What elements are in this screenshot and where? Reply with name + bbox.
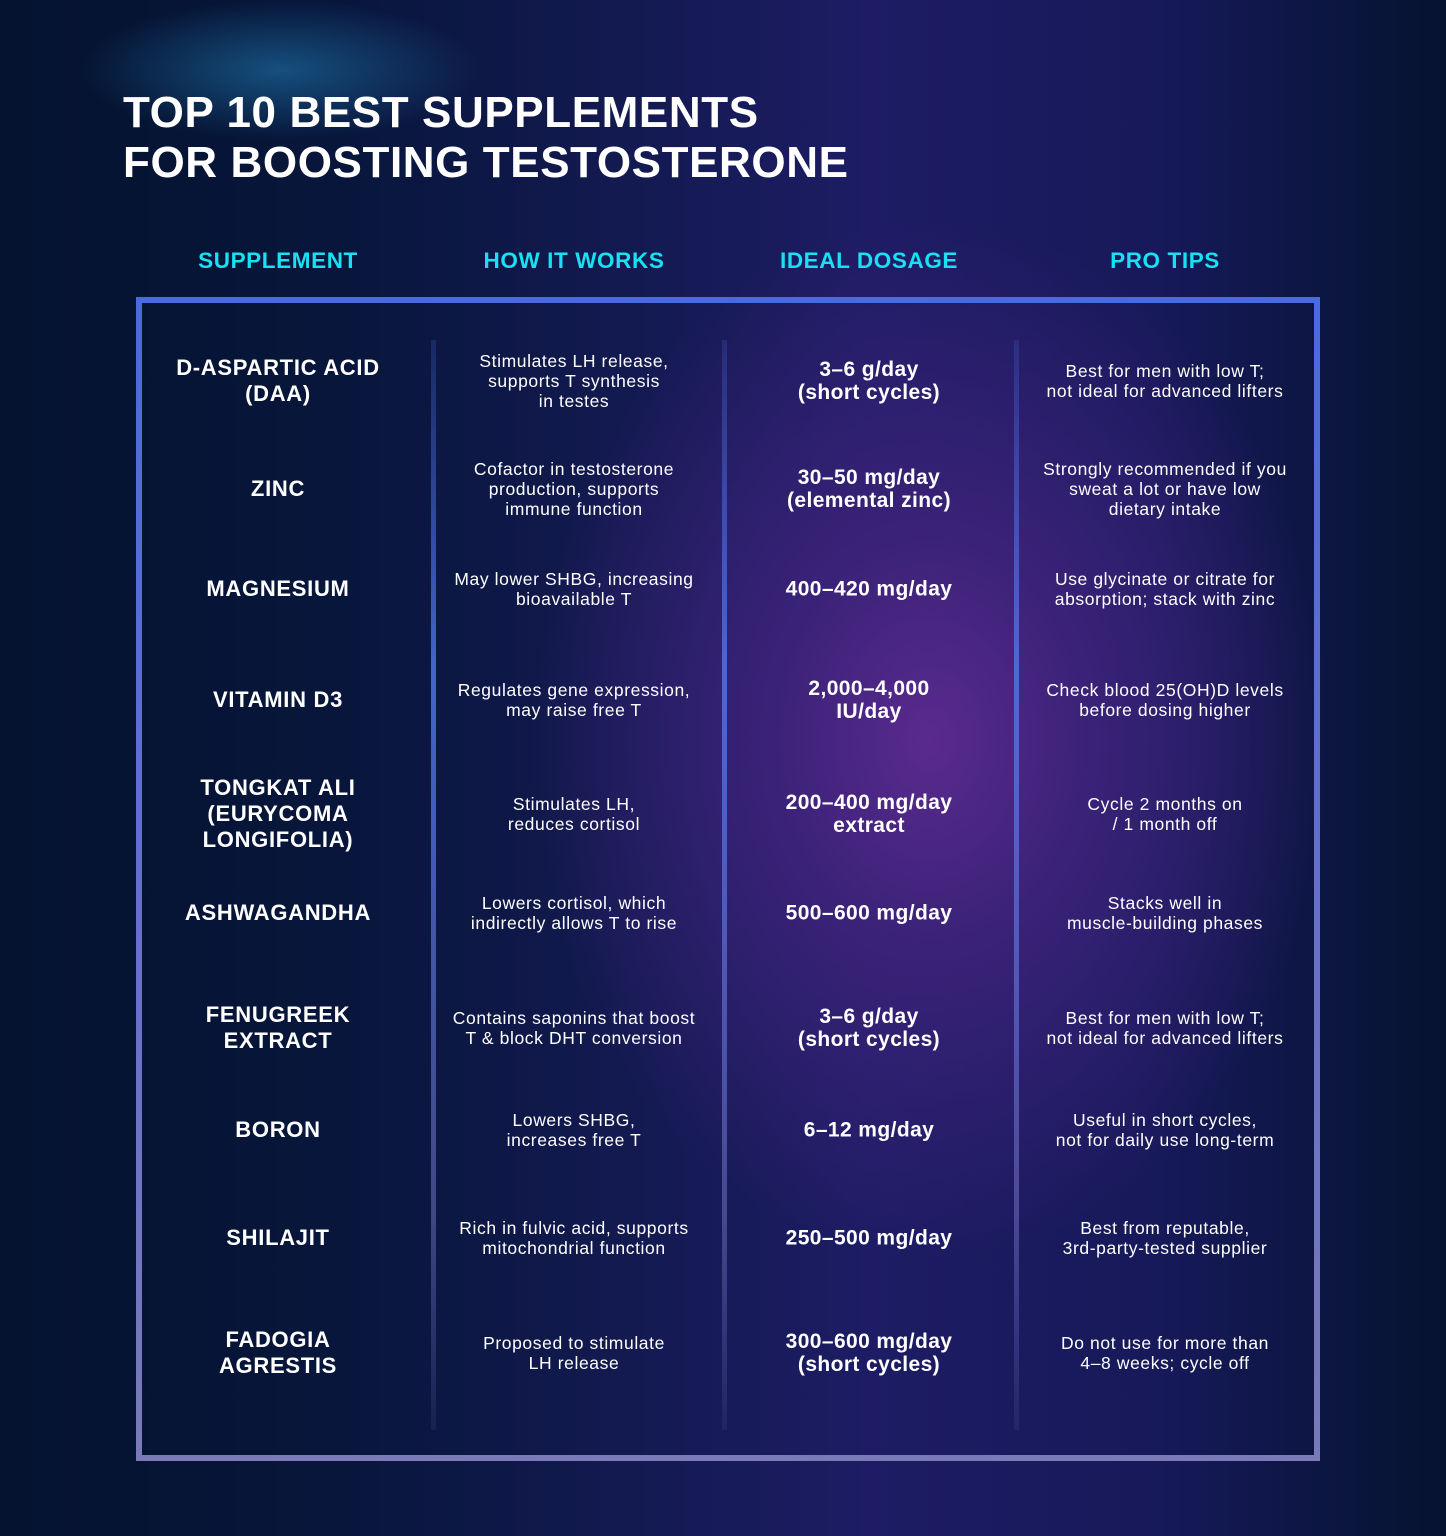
- table rows: 3–6 g/day: [819, 1005, 919, 1028]
- column headers: PRO TIPS: [1110, 248, 1220, 273]
- table rows: 500–600 mg/day: [786, 902, 952, 924]
- table rows: Do not use for more than: [1061, 1333, 1269, 1353]
- table rows: 6–12 mg/day: [804, 1118, 934, 1142]
- table rows: 3–6 g/day: [819, 358, 919, 381]
- table rows: ZINC: [251, 476, 305, 501]
- table frame: [136, 297, 1320, 1461]
- table rows: (short cycles): [798, 1353, 940, 1376]
- title: [123, 88, 849, 187]
- table rows: (elemental zinc): [787, 489, 951, 512]
- table rows: production, supports: [489, 479, 659, 499]
- table rows: 400–420 mg/day: [786, 578, 952, 600]
- table rows: 250–500 mg/day: [786, 1226, 952, 1250]
- title: FOR BOOSTING TESTOSTERONE: [123, 138, 849, 187]
- table rows: / 1 month off: [1113, 814, 1217, 834]
- table rows: Stacks well in: [1108, 893, 1222, 913]
- table rows: VITAMIN D3: [213, 687, 343, 712]
- table rows: mitochondrial function: [482, 1238, 666, 1258]
- table rows: ASHWAGANDHA: [185, 900, 371, 925]
- table rows: SHILAJIT: [226, 1225, 330, 1250]
- table rows: Use glycinate or citrate for: [1055, 569, 1275, 589]
- table rows: May lower SHBG, increasing: [454, 569, 694, 589]
- table rows: Rich in fulvic acid, supports: [459, 1218, 689, 1238]
- table rows: immune function: [505, 499, 643, 519]
- table rows: Cycle 2 months on: [1087, 794, 1243, 814]
- table rows: T & block DHT conversion: [465, 1028, 683, 1048]
- table rows: LONGIFOLIA): [203, 827, 353, 852]
- row: shilajit: [226, 1218, 1267, 1258]
- table rows: Stimulates LH release,: [479, 351, 669, 371]
- column headers: HOW IT WORKS: [484, 248, 664, 273]
- row: ashwagandha: [185, 893, 1263, 933]
- table rows: Regulates gene expression,: [458, 680, 690, 700]
- table rows: LH release: [529, 1353, 619, 1373]
- table rows: Check blood 25(OH)D levels: [1046, 680, 1284, 700]
- table rows: (DAA): [245, 381, 311, 406]
- table rows: Best for men with low T;: [1066, 1008, 1264, 1028]
- table rows: indirectly allows T to rise: [471, 913, 677, 933]
- table rows: IU/day: [836, 700, 902, 723]
- row: vitamin D3: [213, 677, 1284, 723]
- row: magnesium: [206, 569, 1275, 609]
- table rows: Proposed to stimulate: [483, 1333, 665, 1353]
- table rows: increases free T: [507, 1130, 641, 1150]
- table rows: Stimulates LH,: [513, 794, 635, 814]
- column headers: [198, 248, 1220, 273]
- table rows: Cofactor in testosterone: [474, 459, 674, 479]
- table rows: Lowers cortisol, which: [482, 893, 666, 913]
- table rows: not ideal for advanced lifters: [1047, 381, 1283, 401]
- table rows: 2,000–4,000: [808, 677, 930, 700]
- table rows: MAGNESIUM: [206, 576, 350, 601]
- column headers: SUPPLEMENT: [198, 248, 358, 273]
- table rows: EXTRACT: [224, 1028, 332, 1053]
- table rows: AGRESTIS: [219, 1353, 337, 1378]
- row: boron: [235, 1110, 1274, 1150]
- table rows: extract: [833, 814, 905, 837]
- table rows: bioavailable T: [516, 589, 632, 609]
- table rows: 4–8 weeks; cycle off: [1080, 1353, 1250, 1373]
- table rows: D-ASPARTIC ACID: [176, 355, 380, 380]
- table rows: Best from reputable,: [1080, 1218, 1250, 1238]
- table rows: absorption; stack with zinc: [1055, 589, 1275, 609]
- table rows: 300–600 mg/day: [786, 1330, 952, 1353]
- table rows: FADOGIA: [225, 1327, 331, 1352]
- table rows: 3rd-party-tested supplier: [1063, 1238, 1267, 1258]
- table rows: not ideal for advanced lifters: [1047, 1028, 1283, 1048]
- table rows: 200–400 mg/day: [786, 791, 952, 814]
- table rows: reduces cortisol: [508, 814, 640, 834]
- table rows: Lowers SHBG,: [513, 1110, 635, 1130]
- table rows: 30–50 mg/day: [798, 466, 940, 489]
- table rows: before dosing higher: [1079, 700, 1251, 720]
- table rows: (EURYCOMA: [207, 801, 349, 826]
- table rows: Contains saponins that boost: [453, 1008, 695, 1028]
- table rows: muscle-building phases: [1067, 913, 1263, 933]
- table rows: may raise free T: [506, 700, 642, 720]
- table rows: supports T synthesis: [488, 371, 660, 391]
- table rows: Useful in short cycles,: [1073, 1110, 1257, 1130]
- row: fadogia: [219, 1327, 1269, 1378]
- table rows: FENUGREEK: [206, 1002, 350, 1027]
- row: tongkat ali: [200, 775, 1243, 852]
- table rows: dietary intake: [1109, 499, 1221, 519]
- table rows: Best for men with low T;: [1066, 361, 1264, 381]
- table rows: BORON: [235, 1117, 321, 1142]
- table rows: in testes: [539, 391, 609, 411]
- table rows: not for daily use long-term: [1056, 1130, 1274, 1150]
- title: TOP 10 BEST SUPPLEMENTS: [123, 88, 759, 137]
- table rows: Strongly recommended if you: [1043, 459, 1287, 479]
- table rows: (short cycles): [798, 1028, 940, 1051]
- table rows: TONGKAT ALI: [200, 775, 356, 800]
- row: zinc: [251, 459, 1287, 519]
- row: DAA: [176, 351, 1283, 411]
- table rows: sweat a lot or have low: [1069, 479, 1261, 499]
- column headers: IDEAL DOSAGE: [780, 248, 958, 273]
- table rows: (short cycles): [798, 381, 940, 404]
- row: fenugreek: [206, 1002, 1283, 1053]
